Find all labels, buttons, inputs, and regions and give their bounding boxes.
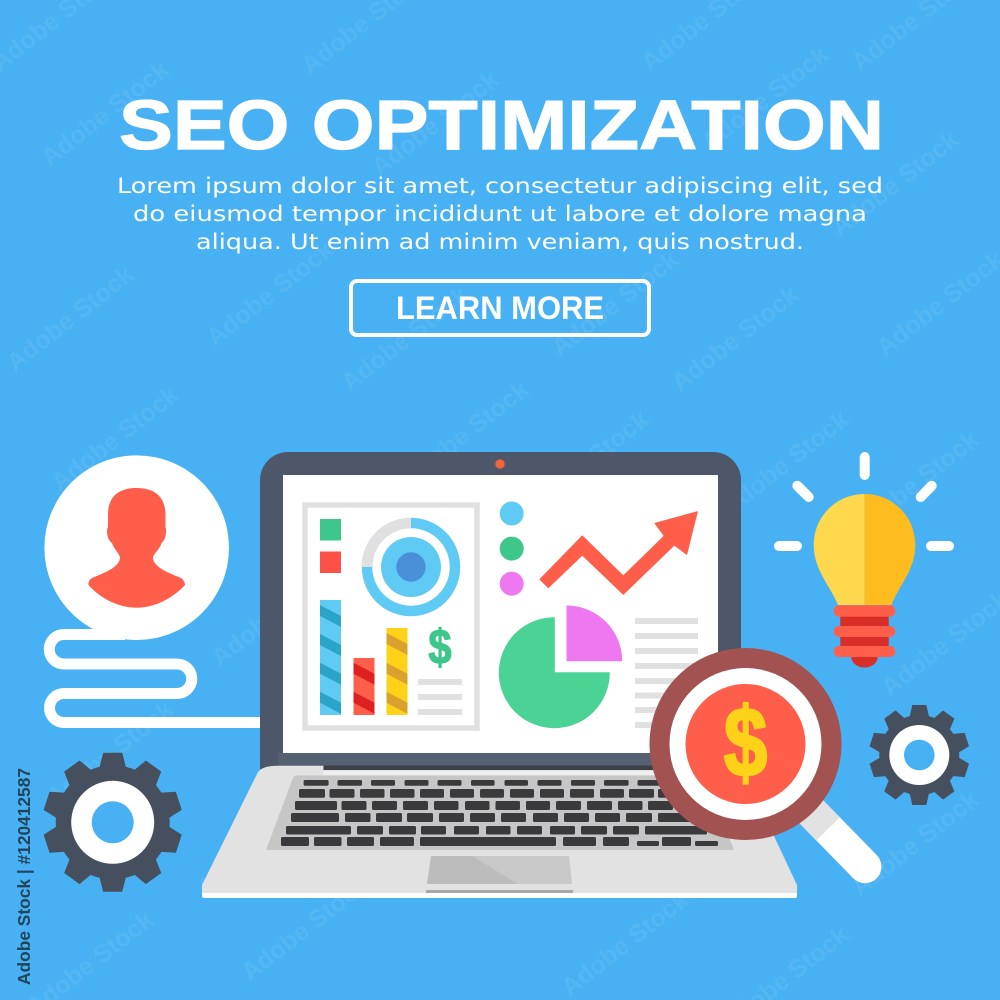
- text: Adobe Stock: [516, 406, 654, 522]
- button: learn more: [351, 281, 649, 335]
- button: learn more: LEARN MORE: [396, 290, 604, 326]
- text block: description: Lorem ipsum dolor sit amet, consectetur adipiscing elit, sed: [117, 174, 883, 199]
- glass: [814, 494, 865, 605]
- dollar: $: [724, 688, 767, 797]
- laptop lid: [260, 452, 741, 770]
- text block: description: aliqua. Ut enim ad minim veniam, quis nostrud.: [196, 230, 804, 255]
- text block: description: [117, 174, 883, 255]
- text: Adobe Stock: [486, 766, 624, 882]
- donut chart: [367, 523, 455, 611]
- bar chart: [320, 600, 408, 715]
- legend squares: [320, 519, 341, 573]
- keyboard keys: [281, 780, 718, 846]
- text: Adobe Stock: [666, 281, 804, 397]
- lens: [650, 648, 842, 840]
- text: Adobe Stock: [336, 281, 474, 397]
- text: Adobe Stock: [826, 126, 964, 242]
- handle: [795, 795, 865, 867]
- trend arrow: [540, 512, 697, 594]
- text: Adobe Stock: [846, 786, 984, 902]
- text: Adobe Stock: [396, 376, 534, 492]
- text: Adobe Stock: [206, 556, 344, 672]
- text lines right: [635, 618, 698, 728]
- text: Adobe Stock: [526, 576, 664, 692]
- text: Adobe Stock: [846, 426, 984, 542]
- touchpad: [426, 856, 573, 893]
- status dots: [500, 502, 524, 596]
- text: Adobe Stock: [36, 56, 174, 172]
- title: SEO OPTIMIZATION: [119, 86, 884, 164]
- text: Adobe Stock: [716, 406, 854, 522]
- laptop base: [202, 766, 797, 898]
- text: Adobe Stock: [46, 381, 184, 497]
- text: Adobe Stock: [546, 246, 684, 362]
- text: Adobe Stock: [191, 786, 329, 902]
- text: Adobe Stock: [201, 236, 339, 352]
- text block: description: do eiusmod tempor incididunt ut labore et dolore magna: [133, 202, 867, 227]
- text: Adobe Stock: [556, 886, 694, 1000]
- keyboard deck: [266, 776, 734, 850]
- text: Adobe Stock: [1, 261, 139, 377]
- text: Adobe Stock: [366, 66, 504, 182]
- laptop: [202, 452, 797, 898]
- rays: [779, 457, 949, 546]
- laptop screen: [283, 475, 718, 753]
- text: Adobe Stock: [41, 696, 179, 812]
- text lines: [418, 679, 462, 715]
- dollar sign: $: [428, 620, 452, 675]
- icon: light bulb: [779, 457, 949, 668]
- text: Adobe Stock: [686, 716, 824, 832]
- text: Adobe Stock: [236, 871, 374, 987]
- text: Adobe Stock: [396, 706, 534, 822]
- icon: user: [44, 455, 229, 640]
- icon: large gear: [42, 753, 183, 892]
- icon: magnifying glass: [650, 648, 865, 867]
- icon: small gear: [869, 705, 970, 805]
- watermark id: Adobe Stock | #120412587: [14, 768, 34, 985]
- webcam: [495, 459, 505, 469]
- socket: [840, 614, 889, 648]
- text: Adobe Stock: [696, 41, 834, 157]
- cable connecting user to laptop: [49, 634, 262, 722]
- pie chart: [499, 606, 622, 728]
- panel: dashboard document: [305, 505, 477, 728]
